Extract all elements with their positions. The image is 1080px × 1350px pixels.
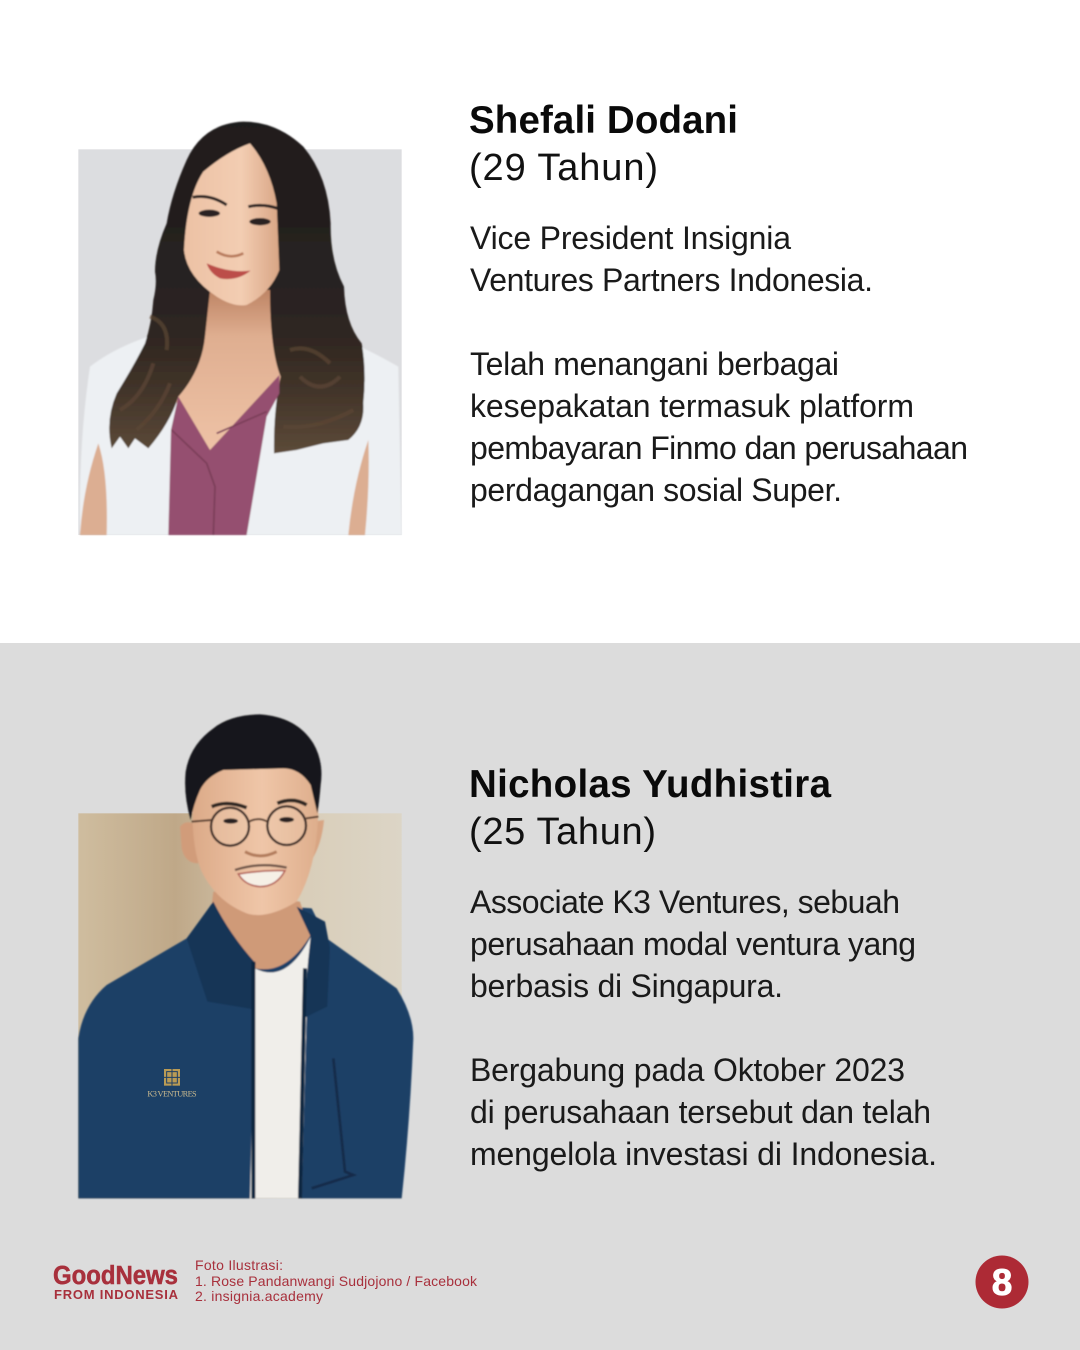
- text: photo credits: 2. insignia.academy: [195, 1288, 323, 1304]
- logo: GoodNews from Indonesia: [53, 1262, 179, 1302]
- text: age 25: (25 Tahun): [469, 811, 656, 853]
- text: experience: pembayaran Finmo dan perusahaan: [470, 430, 968, 466]
- text: role: perusahaan modal ventura yang: [470, 926, 916, 962]
- icon: K3 Ventures jacket logo: [147, 1069, 197, 1098]
- text: experience: perdagangan sosial Super.: [470, 472, 842, 508]
- icon: K3 Ventures jacket logo: K3 VENTURES: [147, 1089, 197, 1098]
- text: role: berbasis di Singapura.: [470, 968, 783, 1004]
- text: role: Vice President Insignia: [470, 220, 791, 256]
- panel: top section background: [0, 0, 1080, 643]
- portrait: Nicholas Yudhistira: [78, 714, 413, 1198]
- text: experience: [470, 346, 968, 508]
- text: photo credits: Foto Ilustrasi:: [195, 1257, 283, 1273]
- text: age 29: (29 Tahun): [469, 147, 658, 189]
- text: experience: kesepakatan termasuk platform: [470, 388, 914, 424]
- text: experience: Telah menangani berbagai: [470, 346, 839, 382]
- text: experience: mengelola investasi di Indonesia.: [470, 1136, 937, 1172]
- logo: GoodNews from Indonesia: FROM INDONESIA: [54, 1287, 179, 1302]
- page number badge: [976, 1256, 1028, 1308]
- text: experience: [470, 1052, 937, 1172]
- text: experience: Bergabung pada Oktober 2023: [470, 1052, 905, 1088]
- panel: bottom section background: [0, 643, 1080, 1350]
- text: photo credits: [195, 1257, 478, 1304]
- text: photo credits: 1. Rose Pandanwangi Sudjojono / Facebook: [195, 1273, 478, 1289]
- logo: GoodNews from Indonesia: GoodNews: [53, 1262, 178, 1290]
- text: role: Ventures Partners Indonesia.: [470, 262, 873, 298]
- text: role: [470, 884, 916, 1004]
- text: role: [470, 220, 873, 298]
- text block: Shefali Dodani profile: [469, 99, 968, 508]
- heading: Shefali Dodani: Shefali Dodani: [469, 99, 738, 142]
- text block: Nicholas Yudhistira profile: [469, 763, 937, 1172]
- heading: Nicholas Yudhistira: Nicholas Yudhistira: [469, 763, 832, 806]
- page number badge: 8: [992, 1262, 1012, 1303]
- text: experience: di perusahaan tersebut dan telah: [470, 1094, 931, 1130]
- text: role: Associate K3 Ventures, sebuah: [470, 884, 900, 920]
- portrait: Shefali Dodani: [78, 122, 402, 535]
